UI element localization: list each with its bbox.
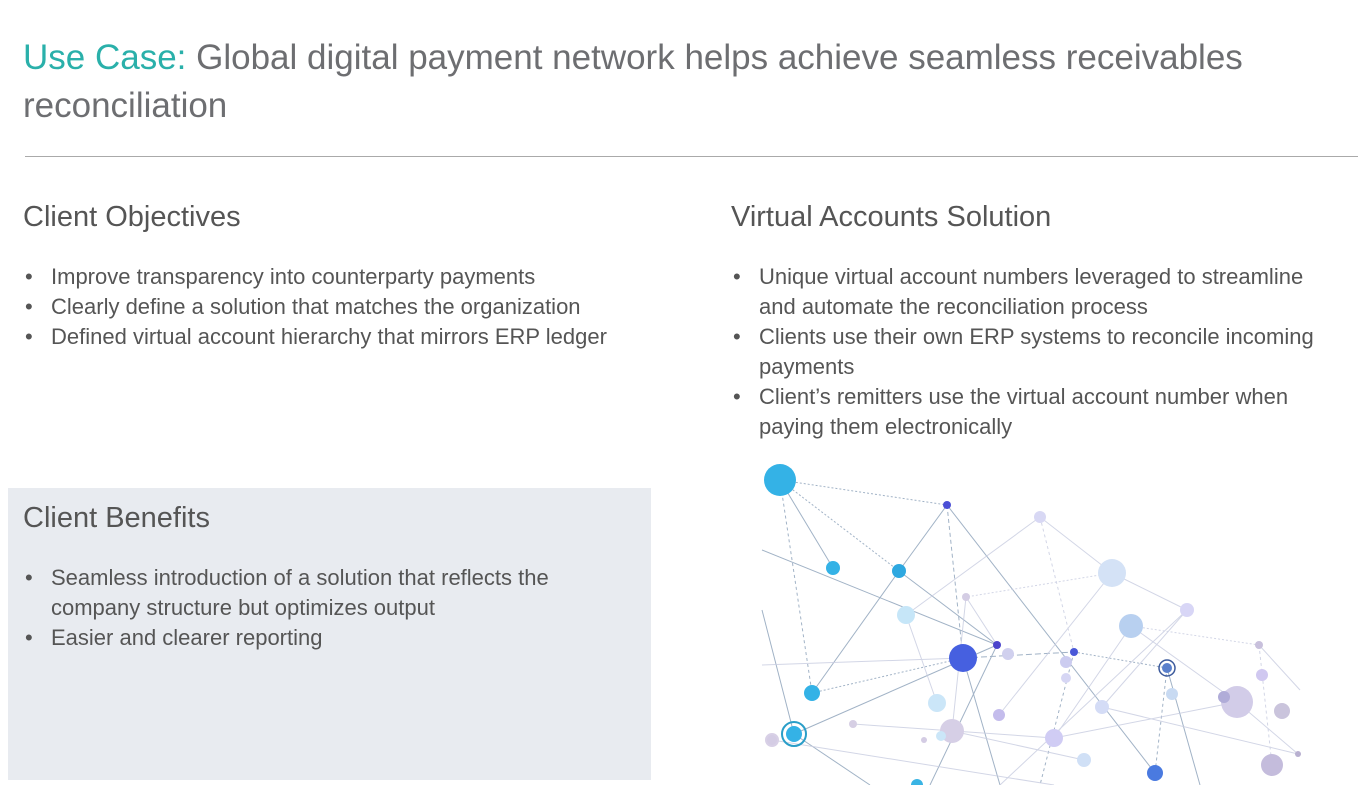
- panel: client objectives: Client Objectives: [23, 201, 241, 233]
- panel: client objectives: [23, 201, 607, 349]
- panel: client objectives: Clearly define a solution that matches the organization: [51, 294, 581, 319]
- panel: virtual accounts solution: Clients use their own ERP systems to reconcile incoming payments: [759, 324, 1314, 379]
- panel: client benefits: [8, 488, 651, 780]
- panel: client objectives: Improve transparency into counterparty payments: [51, 264, 535, 289]
- title: Use Case: Global digital payment network helps achieve seamless receivables reconciliation: [23, 38, 1243, 125]
- panel: client benefits: Easier and clearer reporting: [51, 625, 322, 650]
- panel: virtual accounts solution: Unique virtual account numbers leveraged to streamline and automate the reconciliation process: [759, 264, 1303, 319]
- panel: client benefits: Client Benefits: [23, 502, 210, 534]
- panel: virtual accounts solution: Client’s remitters use the virtual account number when paying them electronically: [759, 384, 1288, 439]
- panel: client benefits: Seamless introduction of a solution that reflects the company structure but optimizes output: [51, 565, 549, 620]
- panel: client objectives: Defined virtual account hierarchy that mirrors ERP ledger: [51, 324, 607, 349]
- panel: virtual accounts solution: Virtual Accounts Solution: [731, 201, 1051, 233]
- panel: virtual accounts solution: [731, 201, 1314, 439]
